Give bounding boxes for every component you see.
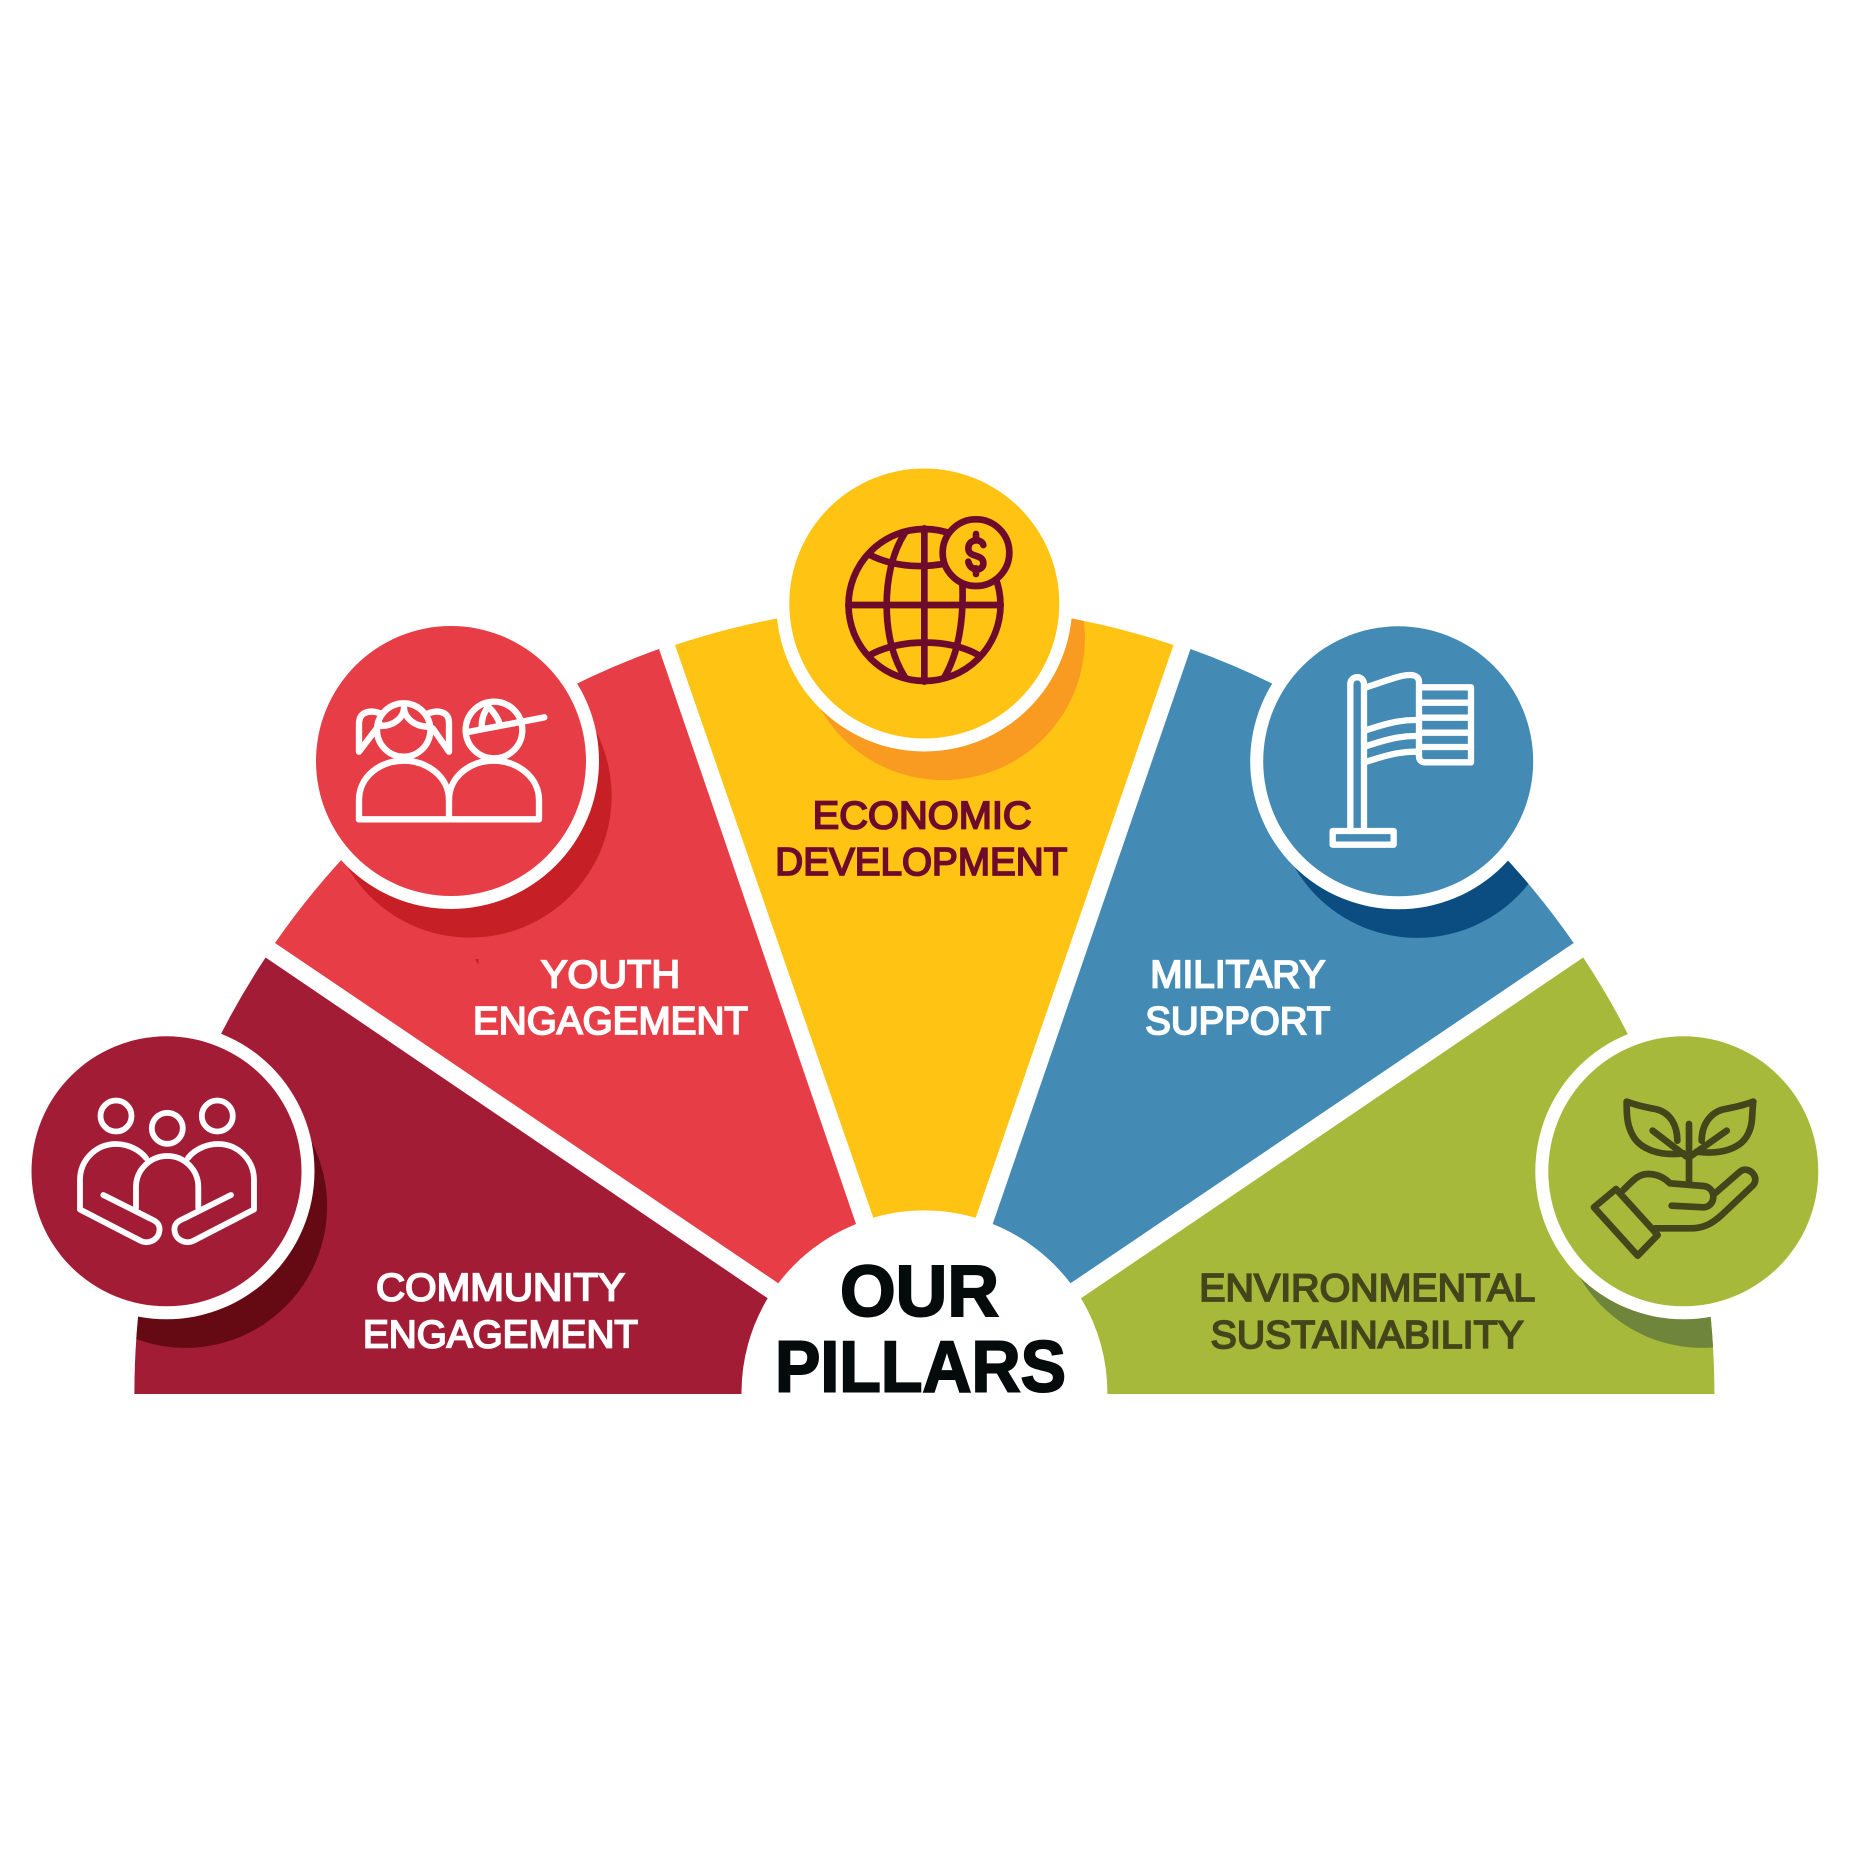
label: environmental sustainability: ENVIRONMENTAL (1199, 1267, 1535, 1310)
sector: economic development (675, 605, 1174, 1218)
label: youth engagement: ENGAGEMENT (473, 1000, 748, 1043)
sector: military support (993, 649, 1574, 1283)
label: military support: MILITARY (1150, 954, 1325, 997)
sector: youth engagement (275, 649, 856, 1283)
circle: economic (789, 468, 1059, 738)
circle ring: military (1250, 613, 1546, 909)
circle shadow: community (136, 1142, 328, 1348)
label: economic development: DEVELOPMENT (775, 841, 1067, 884)
circle shadow: economic (820, 618, 1085, 780)
circle shadow: environmental (1580, 1277, 1713, 1348)
icon: flag on pole (1333, 675, 1471, 845)
panel: military support (993, 613, 1574, 1283)
label: military support: SUPPORT (1145, 1000, 1330, 1043)
circle: military (1263, 626, 1533, 896)
circle ring: economic (776, 456, 1072, 752)
circle: youth (316, 626, 586, 896)
panel: youth engagement (275, 613, 856, 1283)
label: environmental sustainability: SUSTAINABILITY (1211, 1314, 1524, 1357)
icon: hand holding seedling (1594, 1102, 1755, 1256)
circle: community (32, 1036, 302, 1306)
title: our pillars: OUR (840, 1252, 999, 1332)
circle ring: community (18, 1023, 314, 1319)
circle ring: environmental (1535, 1023, 1831, 1319)
panel: economic development (675, 456, 1174, 1218)
title: our pillars: PILLARS (775, 1327, 1066, 1407)
label: community engagement: ENGAGEMENT (363, 1313, 638, 1356)
label: community engagement: COMMUNITY (376, 1267, 625, 1310)
circle ring: youth (303, 613, 599, 909)
panel: community engagement (18, 958, 768, 1394)
sector: community engagement (134, 958, 768, 1394)
icon: two children (359, 702, 544, 819)
icon: globe with dollar coin (848, 519, 1009, 682)
circle shadow: youth (348, 732, 612, 938)
circle shadow: military (1294, 860, 1528, 938)
sector: environmental sustainability (1081, 958, 1714, 1394)
icon: group of people with open hands (80, 1100, 254, 1242)
label: economic development: ECONOMIC (813, 794, 1032, 837)
label: youth engagement: YOUTH (541, 954, 680, 997)
circle: environmental (1548, 1036, 1818, 1306)
panel: environmental sustainability (1081, 958, 1844, 1394)
